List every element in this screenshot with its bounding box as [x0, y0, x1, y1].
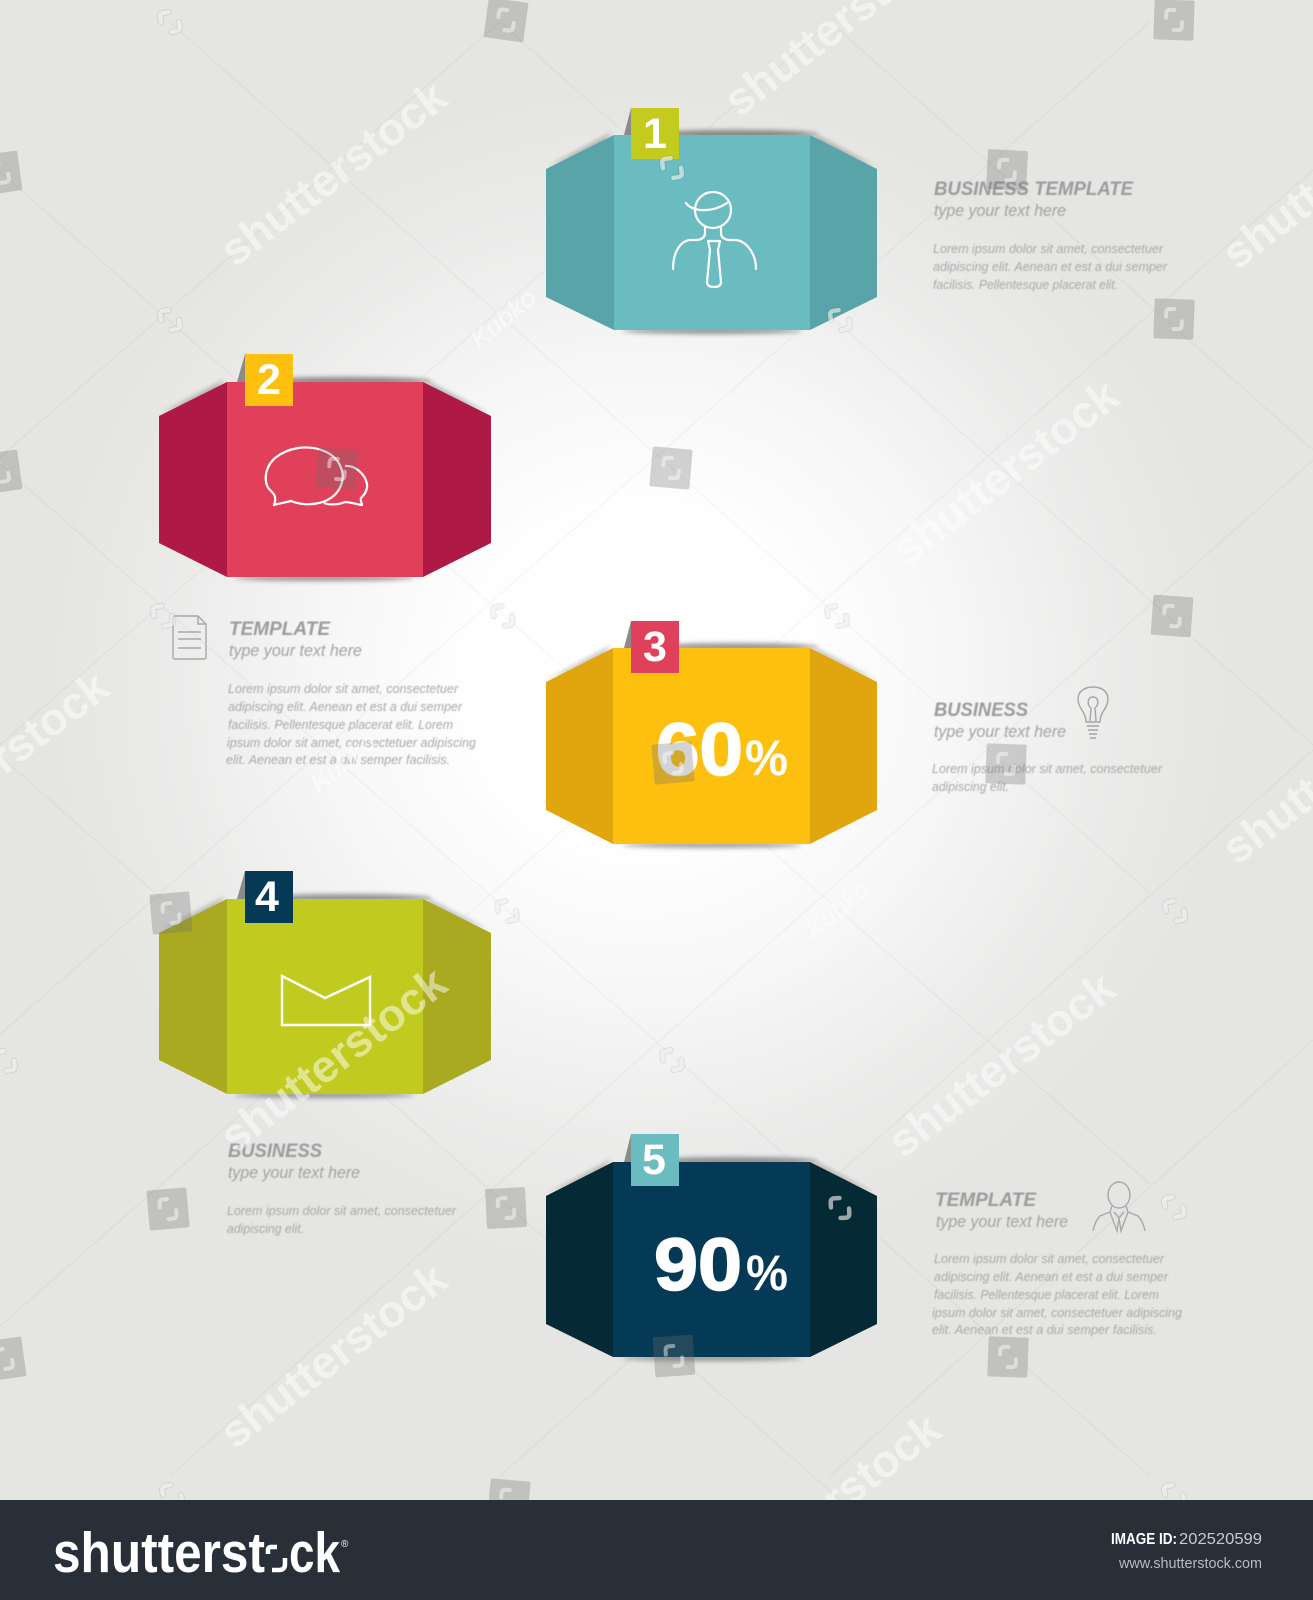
stat 60% — [656, 708, 788, 791]
badge 2 — [245, 354, 293, 406]
badge 1: 1 — [643, 110, 667, 158]
badge 3: 3 — [643, 623, 667, 671]
stock watermark overlay: Kubko — [306, 728, 381, 798]
text block 2: facilisis. Pellentesque placerat elit. Lorem — [228, 717, 453, 732]
step 2 crimson fold panel — [159, 354, 491, 581]
badge 5: 5 — [642, 1136, 666, 1184]
stock watermark overlay: shutterstock — [210, 70, 457, 276]
stat 60%: 60 — [656, 708, 743, 791]
footer bar — [0, 1500, 1313, 1600]
badge 2: 2 — [257, 356, 281, 404]
text block 2: Lorem ipsum dolor sit amet, consectetuer — [228, 681, 459, 696]
icon: businessman — [673, 192, 756, 287]
text block 4: Lorem ipsum dolor sit amet, consectetuer — [227, 1203, 457, 1218]
footer logo: ® — [341, 1539, 349, 1550]
image id: 202520599 — [1179, 1531, 1262, 1548]
badge 3 — [631, 621, 679, 673]
stat 90%: 90 — [654, 1223, 742, 1306]
stock watermark overlay: shutterstock — [878, 961, 1125, 1167]
badge 5 — [631, 1134, 679, 1186]
text block 5: elit. Aenean et est a dui semper facilisis. — [932, 1322, 1157, 1337]
step 3 yellow fold panel — [546, 621, 877, 848]
text block 5: adipiscing elit. Aenean et est a dui semper — [934, 1269, 1169, 1284]
icon: person outline — [1093, 1182, 1145, 1231]
text block 1: facilisis. Pellentesque placerat elit. — [933, 277, 1118, 292]
text block 2: ipsum dolor sit amet, consectetuer adipiscing — [227, 735, 477, 750]
badge 4: 4 — [255, 873, 279, 921]
text block 1 — [933, 179, 1168, 292]
text block 3 — [932, 700, 1163, 794]
badge 1 — [631, 108, 679, 159]
text block 1: BUSINESS TEMPLATE — [934, 179, 1134, 200]
icon: envelope — [282, 976, 370, 1025]
footer logo: ck — [289, 1521, 340, 1585]
icon: document — [173, 616, 206, 659]
website: www.shutterstock.com — [1118, 1555, 1262, 1572]
badge 4 — [245, 871, 293, 923]
stat 60%: % — [745, 730, 788, 786]
footer logo: shutterst — [53, 1521, 265, 1585]
text block 2: type your text here — [229, 641, 362, 660]
stock watermark overlay: shutterstock — [882, 369, 1129, 575]
text block 5: ipsum dolor sit amet, consectetuer adipiscing — [932, 1305, 1183, 1320]
text block 1: adipiscing elit. Aenean et est a dui semper — [933, 259, 1168, 274]
text block 1: Lorem ipsum dolor sit amet, consectetuer — [933, 241, 1164, 256]
text block 3: BUSINESS — [934, 700, 1028, 721]
icon: speech bubbles — [266, 447, 367, 505]
step 4 green fold panel — [159, 871, 491, 1098]
text block 5: facilisis. Pellentesque placerat elit. Lorem — [934, 1287, 1159, 1302]
text block 5: Lorem ipsum dolor sit amet, consectetuer — [934, 1251, 1165, 1266]
icon: light bulb — [1078, 687, 1108, 738]
stock watermark overlay: shutterstock — [210, 1252, 457, 1458]
stock watermark overlay: Kubko — [466, 284, 541, 354]
text block 2: TEMPLATE — [229, 619, 331, 640]
text block 1: type your text here — [934, 201, 1066, 220]
text block 3: adipiscing elit. — [932, 779, 1009, 794]
stat 90% — [654, 1223, 788, 1306]
text block 3: Lorem ipsum dolor sit amet, consectetuer — [932, 761, 1163, 776]
text block 2: adipiscing elit. Aenean et est a dui semper — [228, 699, 463, 714]
step 5 navy fold panel — [546, 1134, 877, 1361]
text block 5: TEMPLATE — [935, 1190, 1037, 1211]
text block 5 — [932, 1190, 1183, 1337]
stat 90%: % — [746, 1245, 788, 1301]
text block 4: BUSINESS — [228, 1141, 322, 1162]
image id — [1111, 1531, 1262, 1548]
text block 3: type your text here — [934, 722, 1066, 741]
text block 4 — [227, 1141, 457, 1236]
text block 5: type your text here — [936, 1212, 1068, 1231]
text block 4: adipiscing elit. — [227, 1221, 304, 1236]
text block 2 — [226, 619, 477, 767]
image id: IMAGE ID: — [1111, 1531, 1177, 1548]
stock watermark overlay: shutterstock — [210, 956, 457, 1162]
text block 2: elit. Aenean et est a dui semper facilisis. — [226, 752, 450, 767]
stock watermark overlay: Kubko — [801, 876, 875, 944]
step 1 teal fold panel — [546, 108, 877, 334]
text block 4: type your text here — [228, 1163, 360, 1182]
